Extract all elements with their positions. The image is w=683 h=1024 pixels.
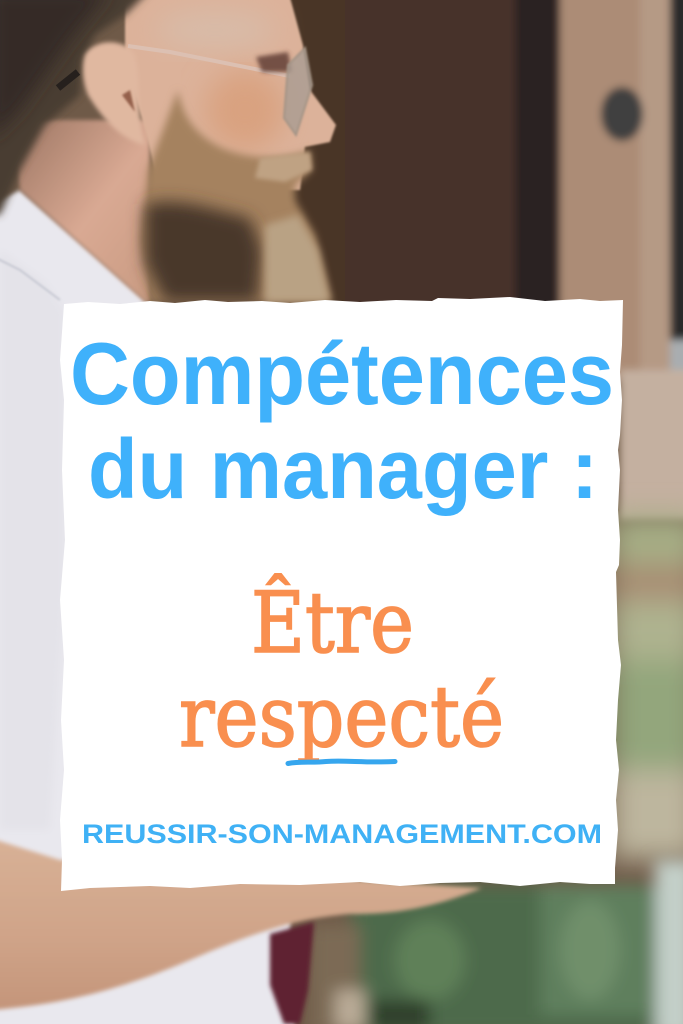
neck	[10, 120, 150, 302]
glasses	[58, 46, 312, 135]
subtitle: Être respecté: respecté	[179, 668, 504, 766]
door and wooden post	[280, 0, 683, 520]
man's shirt	[0, 190, 295, 1024]
subtitle: Être respecté: Être	[251, 574, 414, 672]
face	[125, 0, 336, 190]
man's forearm	[0, 838, 482, 1010]
hair	[0, 0, 150, 215]
subtitle: Être respecté	[179, 574, 504, 766]
tie	[270, 922, 314, 1024]
ear	[83, 42, 145, 145]
website URL: REUSSIR-SON-MANAGEMENT.COM	[82, 819, 602, 849]
title: Compétences du manager: du manager :	[88, 422, 598, 516]
white torn-paper panel	[60, 297, 623, 891]
garden greenery	[610, 515, 683, 860]
hand-drawn underline	[288, 761, 395, 764]
title: Compétences du manager: Compétences	[70, 324, 614, 423]
title: Compétences du manager	[70, 324, 614, 516]
beard	[140, 90, 332, 302]
